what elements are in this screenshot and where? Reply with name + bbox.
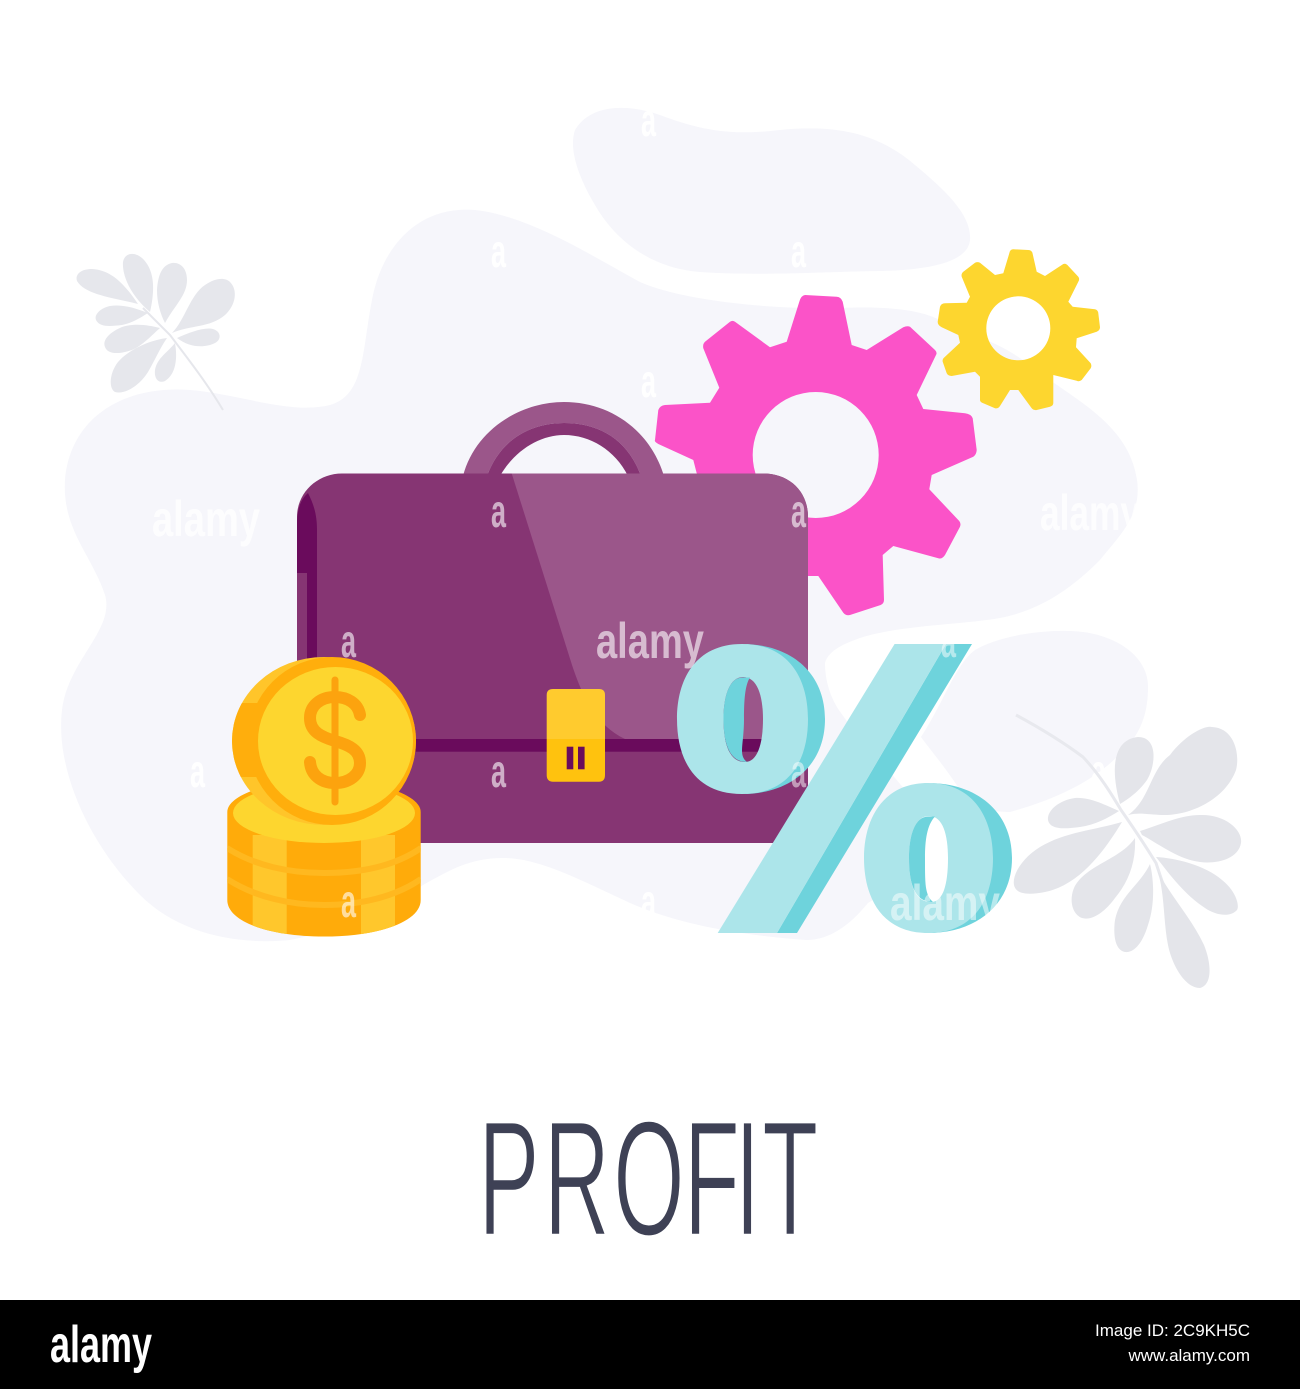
watermark tiles on background: a (1091, 745, 1106, 797)
dollar sign (310, 680, 360, 802)
watermark text: alamy (1040, 485, 1140, 541)
briefcase highlight (512, 474, 808, 739)
watermark tiles on background: a (641, 355, 656, 407)
background blobs (61, 108, 1148, 941)
percent upper zero (677, 644, 825, 794)
watermark tiles on background: a (190, 745, 205, 797)
briefcase dark edge (297, 493, 317, 739)
icon: dollar coin (230, 657, 416, 825)
watermark tiles on background: a (641, 94, 656, 146)
briefcase clasp (547, 689, 605, 782)
watermark text: a (791, 485, 806, 537)
watermark text: a (341, 875, 356, 927)
briefcase handle (463, 402, 664, 476)
watermark text: alamy (890, 875, 1000, 931)
footer url: www.alamy.com (1127, 1346, 1250, 1365)
title: PROFIT (478, 1088, 818, 1271)
icon: briefcase (297, 402, 808, 843)
watermark text: a (941, 615, 956, 667)
percent lower zero (864, 783, 1012, 933)
icon: pink gear (655, 295, 977, 615)
watermark text: alamy (596, 613, 704, 669)
icon: right leaf (1014, 715, 1241, 988)
footer image id: Image ID: 2C9KH5C (1095, 1321, 1250, 1340)
footer bar (0, 1300, 1300, 1389)
briefcase body (297, 474, 808, 843)
watermark text: a (341, 615, 356, 667)
footer logo: alamy (50, 1316, 152, 1374)
watermark text: a (491, 485, 506, 537)
watermark text (152, 485, 1140, 931)
watermark text: alamy (152, 491, 260, 547)
watermark text: a (491, 745, 506, 797)
watermark tiles on background: a (641, 875, 656, 927)
watermark text: a (791, 745, 806, 797)
icon: coin stack (227, 780, 421, 940)
briefcase seam (330, 739, 808, 752)
watermark tiles on background (190, 94, 1106, 927)
icon: left leaf (77, 254, 235, 410)
watermark tiles on background: a (791, 225, 806, 277)
percent slash (718, 644, 972, 933)
watermark tiles on background: a (491, 225, 506, 277)
icon: yellow gear (938, 249, 1100, 410)
icon: percent sign (677, 644, 1012, 933)
